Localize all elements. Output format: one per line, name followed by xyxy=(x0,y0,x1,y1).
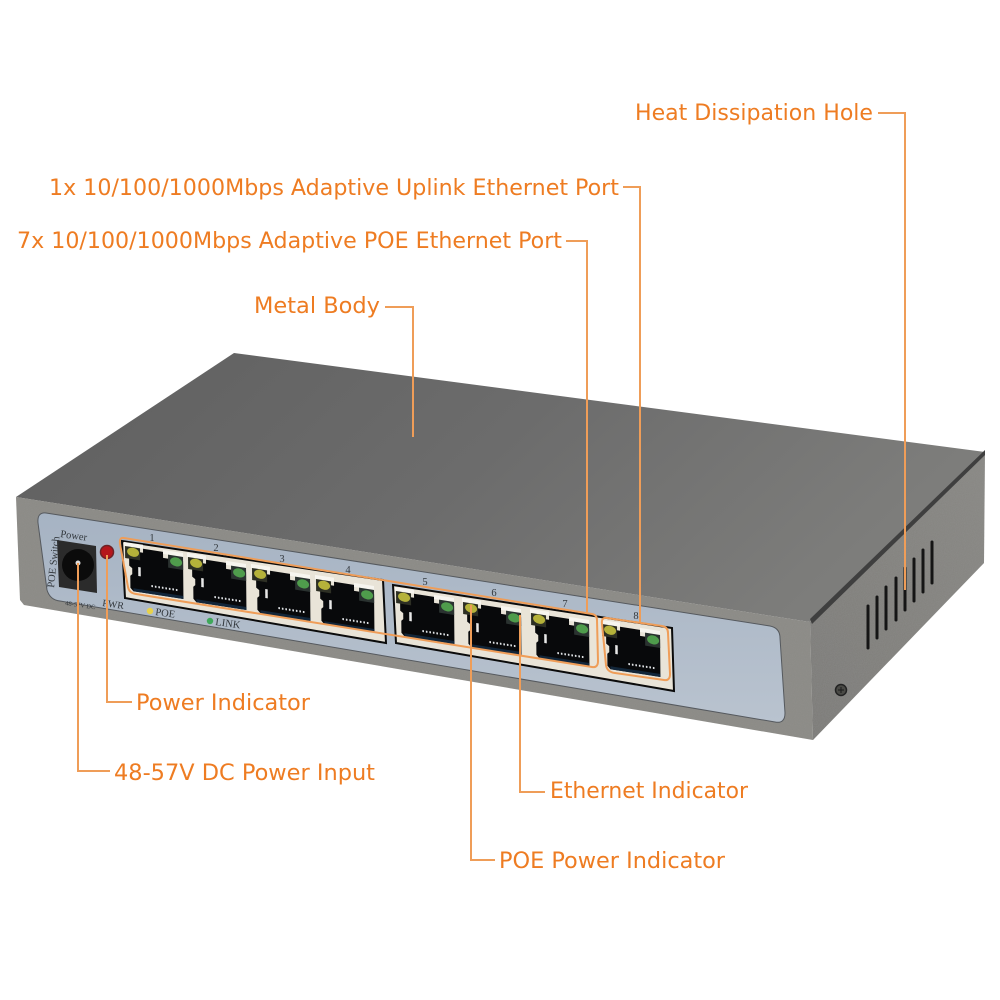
screw xyxy=(836,684,846,696)
callout: heat dissipation hole xyxy=(635,101,905,590)
side top dark edge xyxy=(810,450,985,624)
callout: POE power indicator: POE Power Indicator xyxy=(499,849,726,874)
outline: uplink port xyxy=(602,618,670,680)
port numbers: 6 xyxy=(491,588,497,599)
port numbers: 5 xyxy=(422,577,428,588)
top metal body face xyxy=(16,353,985,622)
callout: uplink ethernet port xyxy=(49,176,640,623)
callout: POE ethernet port: 7x 10/100/1000Mbps Adaptive POE Ethernet Port xyxy=(17,229,562,254)
callout: power indicator xyxy=(107,555,311,716)
LINK legend: LINK xyxy=(215,617,241,632)
port numbers: 4 xyxy=(345,565,351,576)
right side face xyxy=(810,452,985,740)
port block 1-4 xyxy=(122,541,386,643)
heat vents xyxy=(868,542,932,648)
port block 5-8 xyxy=(393,585,674,691)
front face xyxy=(16,497,813,740)
port numbers: 1 xyxy=(149,533,155,544)
callout: ethernet indicator xyxy=(520,615,749,804)
POE switch text: POE Switch xyxy=(46,535,62,588)
port numbers: 2 xyxy=(213,543,219,554)
POE legend: POE xyxy=(155,607,176,621)
power LED xyxy=(100,546,114,558)
callout: POE ethernet port xyxy=(17,229,587,612)
port numbers: 8 xyxy=(633,611,639,622)
power text: Power xyxy=(60,529,88,544)
callout: power indicator: Power Indicator xyxy=(136,691,311,716)
callout: POE power indicator xyxy=(471,605,726,874)
outline: seven POE ports xyxy=(120,538,598,667)
callout: DC power input xyxy=(78,563,375,786)
voltage text: 48-57V DC xyxy=(65,600,96,611)
power jack xyxy=(57,540,97,593)
callout: DC power input: 48-57V DC Power Input xyxy=(114,761,375,786)
callout: uplink ethernet port: 1x 10/100/1000Mbps Adaptive Uplink Ethernet Port xyxy=(49,176,619,201)
PWR text: PWR xyxy=(102,598,125,612)
callout: heat dissipation hole: Heat Dissipation Hole xyxy=(635,101,873,126)
callout: metal body: Metal Body xyxy=(254,294,380,319)
port numbers: 3 xyxy=(279,554,285,565)
switch device xyxy=(16,353,985,740)
port numbers xyxy=(149,533,639,622)
callout: ethernet indicator: Ethernet Indicator xyxy=(550,779,749,804)
port numbers: 7 xyxy=(562,599,568,610)
callout: metal body xyxy=(254,294,413,437)
front panel blue label xyxy=(38,513,785,722)
